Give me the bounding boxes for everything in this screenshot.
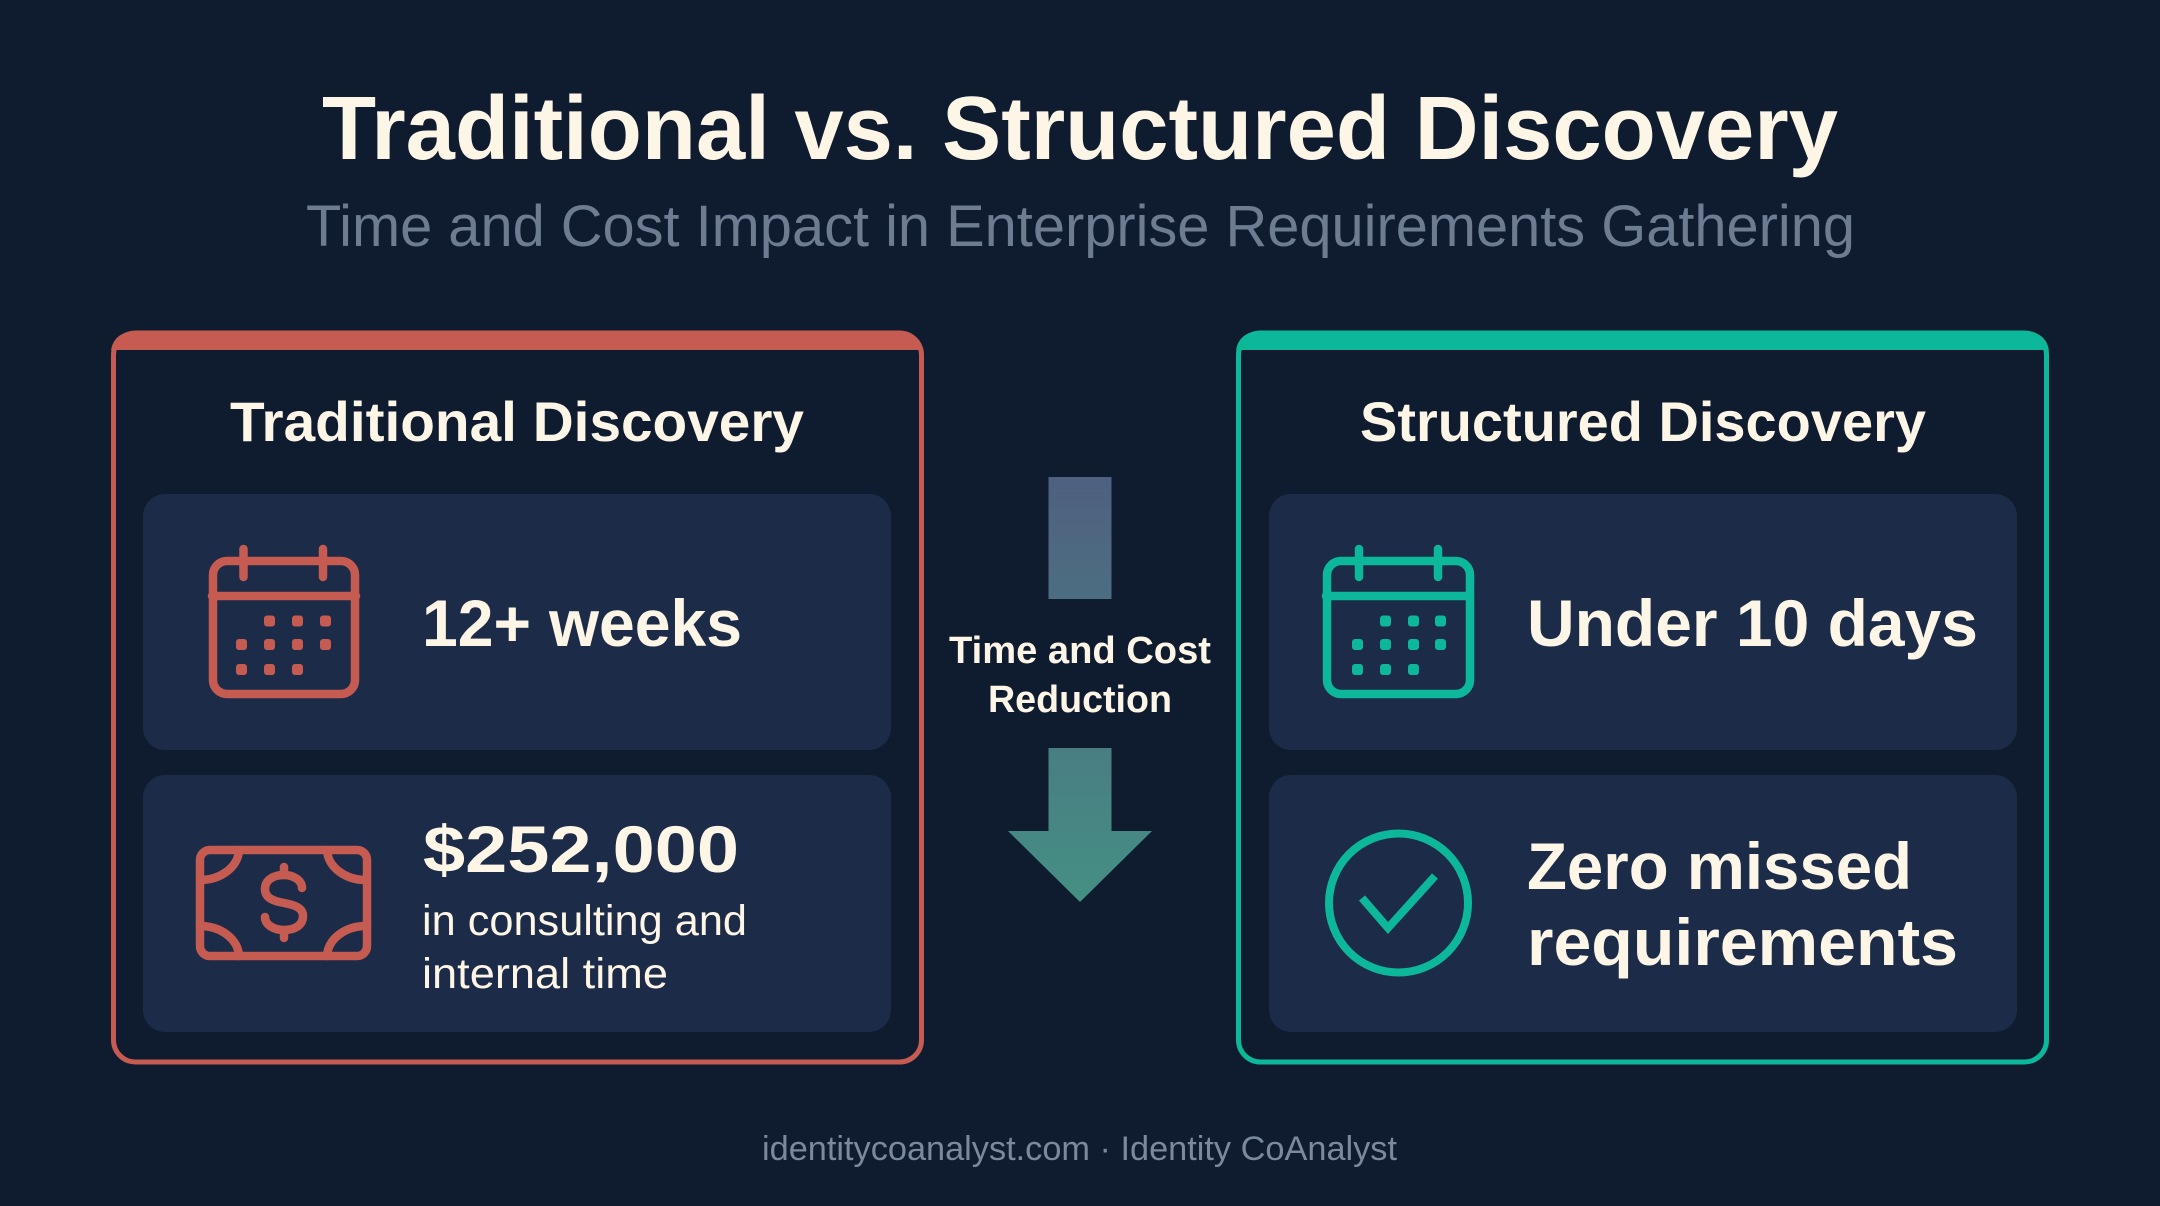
card: duration [143, 494, 891, 750]
stat: under 10 days: Under 10 days [1527, 586, 1978, 660]
footer: identitycoanalyst.com · Identity CoAnalyst [762, 1130, 1398, 1168]
card: quality [1269, 775, 2017, 1032]
stat caption: internal time [422, 950, 668, 998]
arrow label: Reduction [988, 679, 1172, 721]
panel: traditional discovery [111, 331, 923, 1062]
icon: calendar [1326, 549, 1470, 694]
stat: zero missed requirements: Zero missed [1527, 829, 1912, 903]
title: Traditional vs. Structured Discovery [322, 79, 1838, 179]
arrow label [949, 630, 1211, 721]
icon: calendar [212, 549, 356, 694]
stat caption [422, 897, 747, 998]
panel top bar [111, 331, 923, 353]
panel heading: Structured Discovery [1360, 390, 1926, 453]
panel frame [1238, 333, 2046, 1062]
icon: banknote [200, 850, 367, 956]
arrow: reduction [1008, 477, 1152, 902]
panel: structured discovery [1236, 331, 2049, 1062]
arrow label: Time and Cost [949, 630, 1211, 672]
card: cost [143, 775, 891, 1032]
icon: check circle [1329, 834, 1468, 972]
stat: zero missed requirements [1527, 829, 1958, 979]
arrow head [1008, 748, 1152, 902]
stat caption: in consulting and [422, 897, 747, 945]
card: duration [1269, 494, 2017, 750]
arrow shaft upper [1048, 477, 1112, 599]
panel heading: Traditional Discovery [230, 390, 804, 453]
panel frame [114, 333, 922, 1062]
subtitle: Time and Cost Impact in Enterprise Requirements Gathering [306, 194, 1855, 259]
stat: 12+ weeks: 12+ weeks [422, 586, 742, 660]
stat: zero missed requirements: requirements [1527, 905, 1958, 979]
panel top bar [1236, 331, 2049, 353]
stat: $252,000: $252,000 [423, 812, 739, 886]
